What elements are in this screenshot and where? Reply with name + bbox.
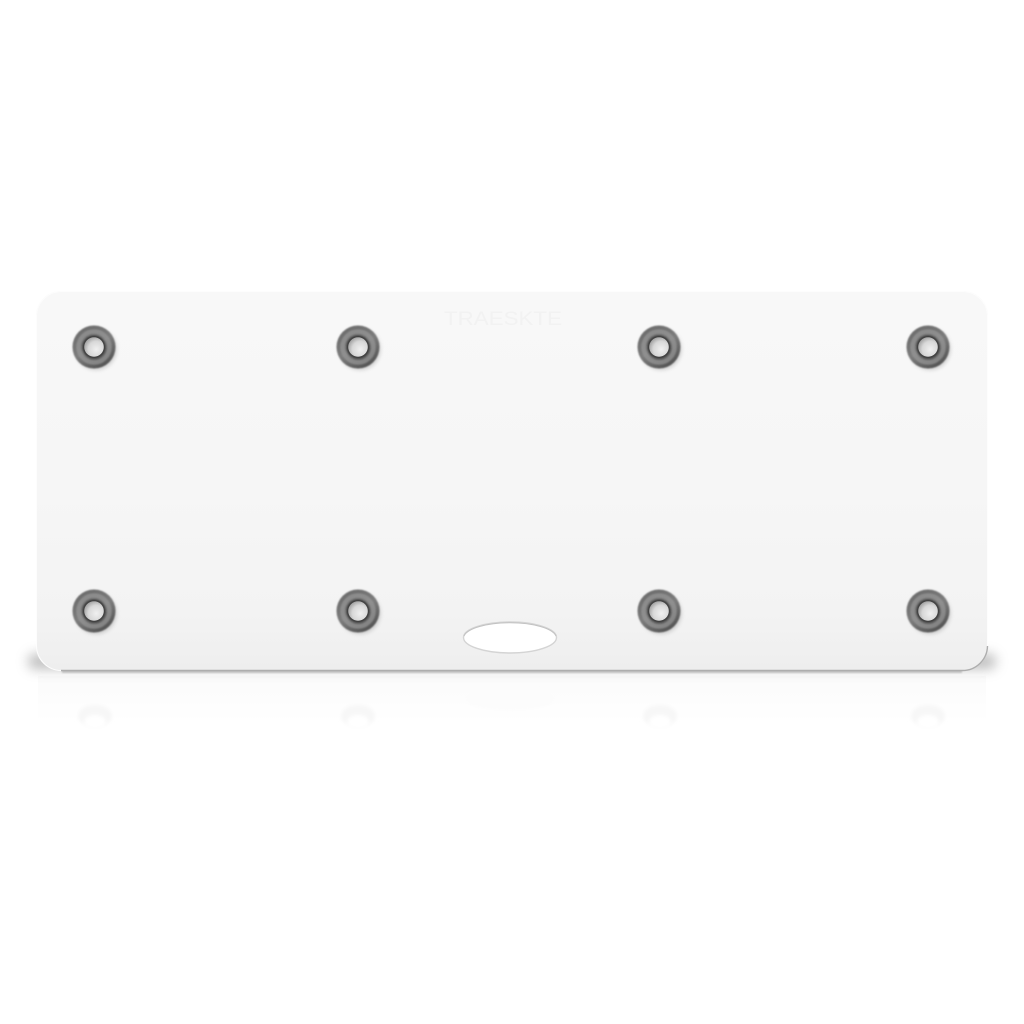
bottom row grommets [72, 590, 951, 634]
floor reflection [38, 676, 986, 729]
plate panel [36, 291, 988, 671]
embossed brand text: TRAESKTE [444, 309, 562, 330]
top row grommets [72, 326, 951, 370]
plate drop shadow [28, 654, 996, 673]
oval cutout [464, 622, 556, 653]
